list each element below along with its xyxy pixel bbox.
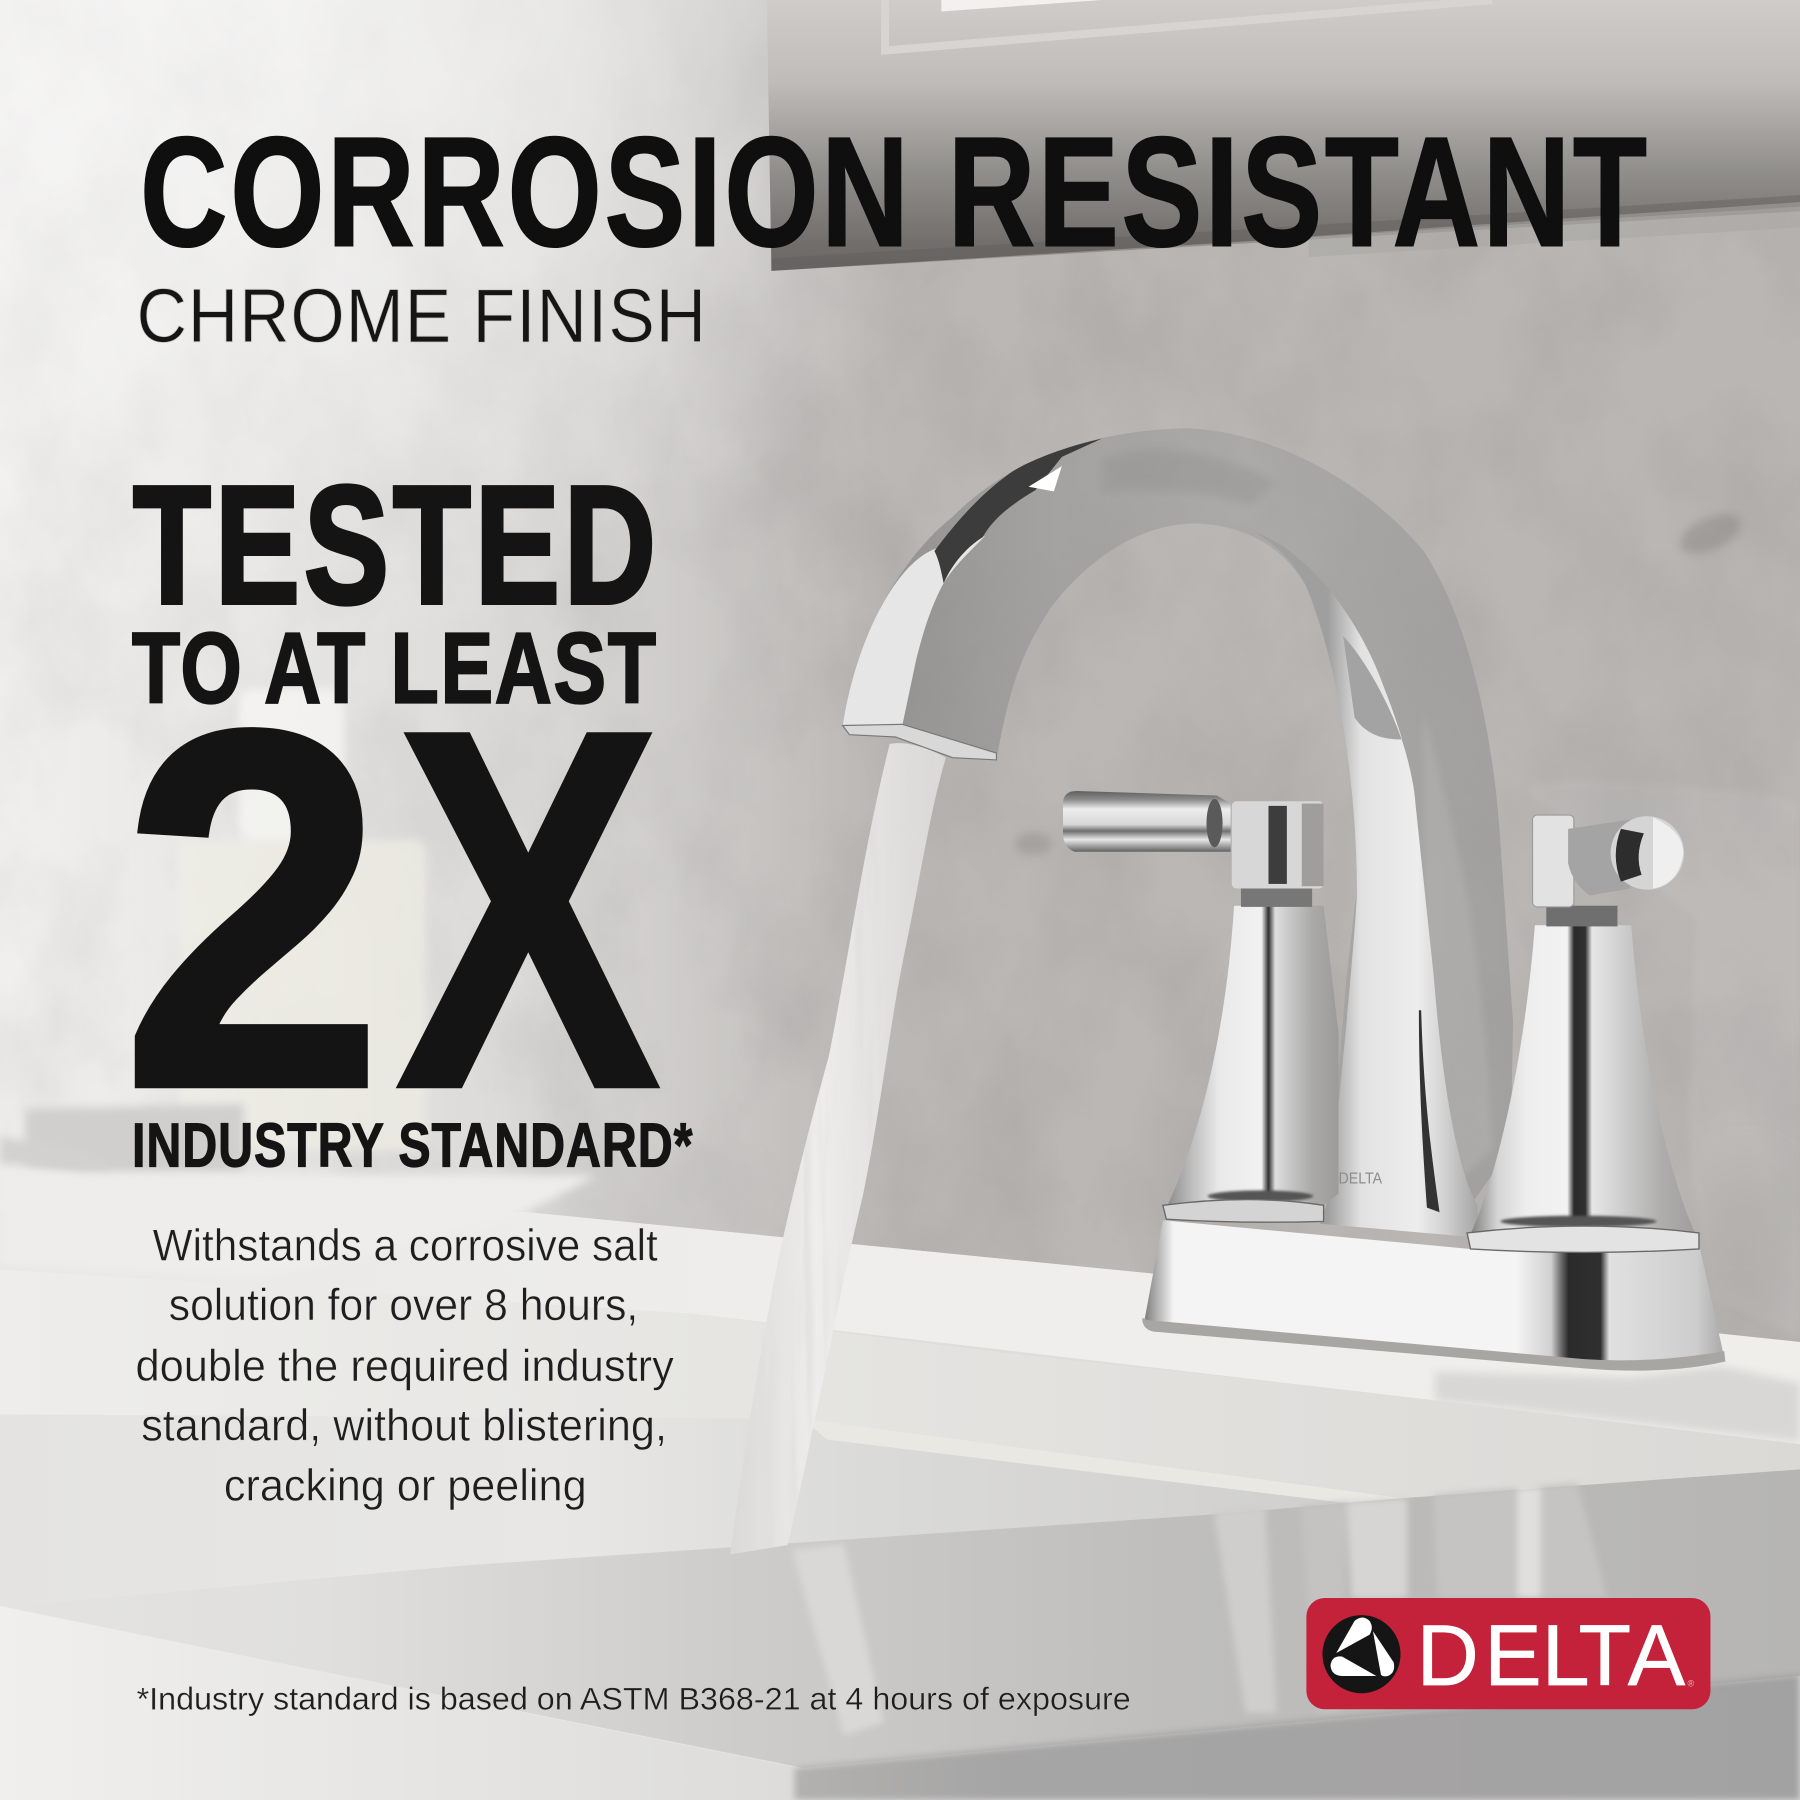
registered mark: ® <box>1688 1678 1695 1688</box>
to at least line: TO AT LEAST <box>132 614 658 725</box>
water stream <box>730 743 946 1554</box>
Delta logo <box>1306 1598 1710 1709</box>
right handle base ring <box>1467 1226 1699 1252</box>
footnote: *Industry standard is based on ASTM B368-21 at 4 hours of exposure <box>137 1680 1131 1716</box>
spout underside <box>843 724 996 760</box>
subtitle: CHROME FINISH <box>137 274 707 359</box>
column dark reflection <box>1419 1010 1440 1212</box>
body copy: Withstands a corrosive salt <box>153 1221 658 1270</box>
deck reflections of the faucet <box>792 1483 1607 1736</box>
right handle block <box>1533 815 1574 907</box>
left handle collar <box>1241 886 1312 907</box>
body copy: cracking or peeling <box>224 1461 587 1510</box>
tested headline: TESTED <box>133 451 660 639</box>
body copy <box>135 1221 674 1510</box>
industry standard line: INDUSTRY STANDARD* <box>132 1111 693 1180</box>
background: marble wall <box>0 0 1800 1355</box>
spout front face <box>843 536 985 726</box>
body copy: standard, without blistering, <box>141 1402 667 1451</box>
base plate <box>1142 1220 1725 1371</box>
icon: Delta triangle mark <box>1322 1615 1401 1693</box>
spout highlights <box>1029 466 1062 491</box>
faucet <box>838 425 1800 1371</box>
2X big figure <box>122 626 661 1193</box>
reflection under faucet on counter <box>1435 1366 1800 1442</box>
2X big figure: 2 <box>122 626 383 1193</box>
left handle bell <box>1167 906 1339 1205</box>
2X big figure: X <box>397 626 661 1193</box>
body copy: double the required industry <box>135 1342 674 1391</box>
deck front right <box>794 1674 1800 1800</box>
deck front left <box>0 1606 794 1800</box>
counter front lip <box>0 1270 1800 1498</box>
right lever handle <box>1568 816 1684 895</box>
bright strip below lip <box>804 1419 1403 1503</box>
lower reflective deck <box>0 1469 1800 1768</box>
spout dark reflection <box>934 439 1102 583</box>
left handle base crease <box>1208 1190 1313 1202</box>
right handle bell <box>1471 925 1696 1234</box>
left handle base ring <box>1163 1200 1324 1222</box>
logo wordmark: DELTA <box>1417 1608 1686 1704</box>
blurred bottles behind headline <box>178 689 426 1150</box>
left handle block <box>1232 801 1324 889</box>
white fade over left side of the photo <box>0 0 1033 1800</box>
vanity counter top <box>0 1212 1800 1444</box>
blurred soap dish <box>0 1104 597 1277</box>
DELTA engraving on column: DELTA <box>1339 1170 1382 1188</box>
left lever handle <box>1063 791 1231 852</box>
center column with inner arch highlight <box>1256 533 1477 1238</box>
wall cabinet <box>767 0 1800 271</box>
right handle collar <box>1546 906 1617 926</box>
spout arch <box>838 425 1527 1228</box>
right handle base crease <box>1500 1216 1657 1227</box>
faucet glass reflection right <box>1527 780 1800 1337</box>
highlight gray patch <box>1343 636 1407 758</box>
sink basin <box>0 1414 1403 1607</box>
body copy: solution for over 8 hours, <box>169 1281 638 1330</box>
